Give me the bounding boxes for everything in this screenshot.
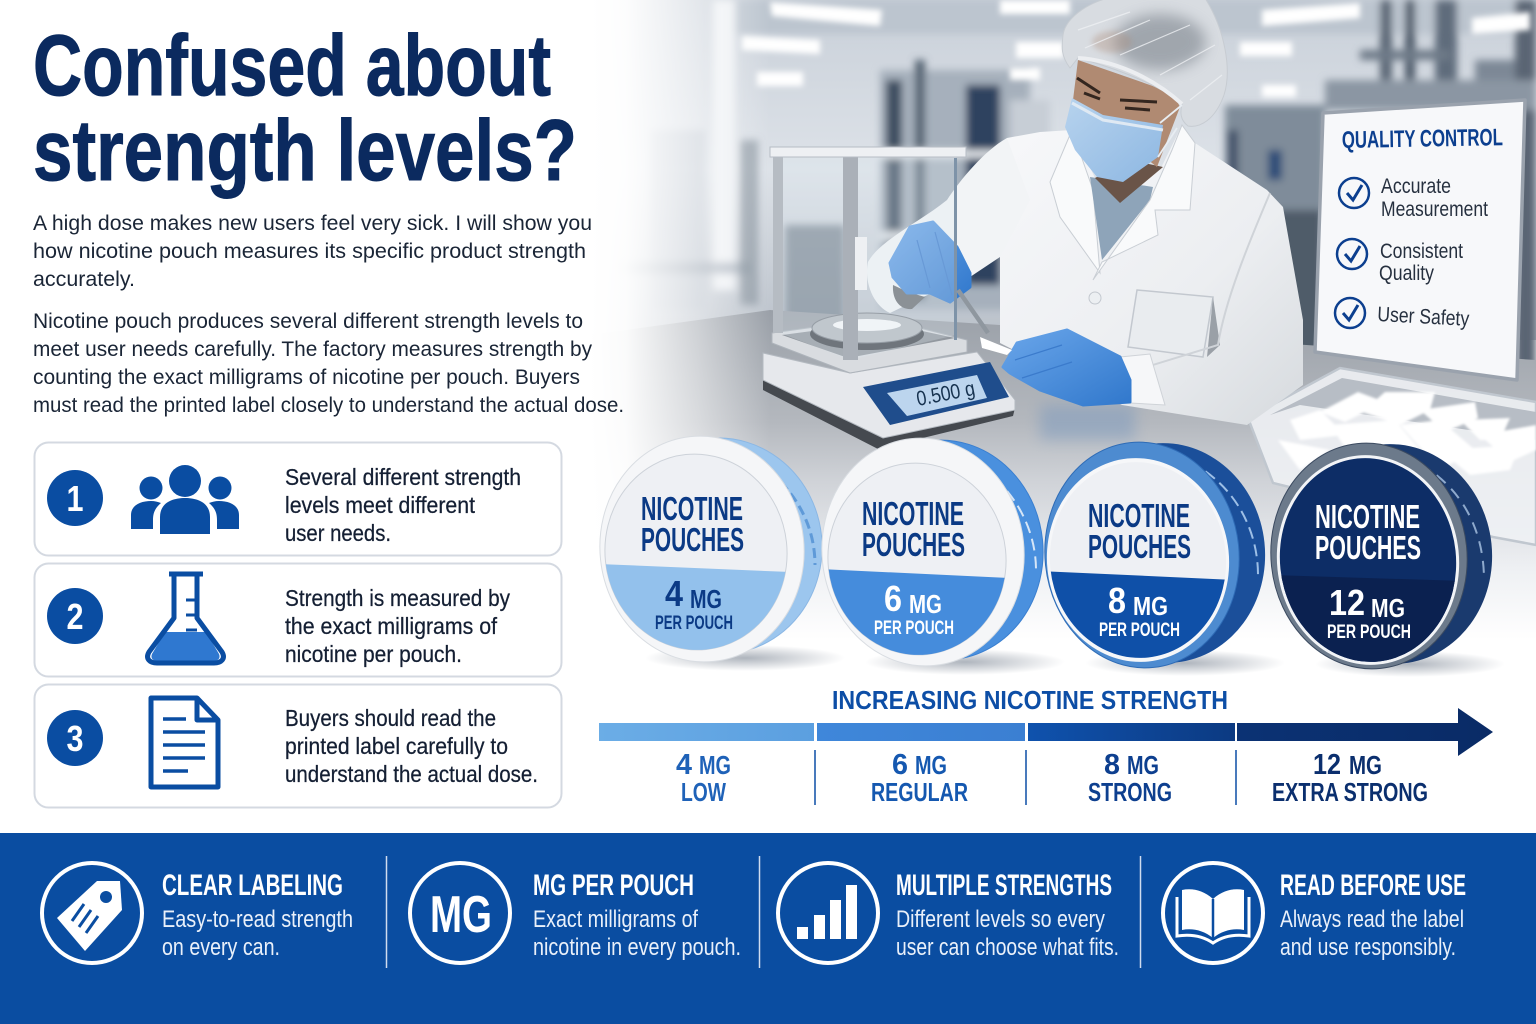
feature: clear labeling: CLEAR LABELING	[162, 869, 343, 902]
label: 8 mg strong	[1088, 749, 1172, 807]
surgical mask	[1065, 98, 1182, 182]
label: 4 mg low: LOW	[681, 777, 726, 807]
feature: clear labeling	[42, 863, 353, 963]
pocket	[1128, 290, 1213, 357]
can: 12 mg: 12	[1329, 582, 1365, 623]
face	[1073, 60, 1180, 167]
hairnet	[1062, 0, 1227, 126]
icon: price tag	[42, 863, 142, 963]
plastic tray with pouches	[1248, 368, 1536, 545]
can: 6 mg	[821, 438, 1044, 666]
feature: mg per pouch: Exact milligrams of	[533, 906, 698, 933]
card 3: read label	[34, 684, 562, 808]
icon: flask	[148, 574, 223, 663]
gloved left hand	[890, 222, 970, 302]
shirt	[1090, 177, 1153, 260]
quality control sign	[1315, 100, 1525, 380]
can: 4 mg: 4	[665, 573, 683, 614]
card 2: measurement	[34, 564, 562, 676]
can: 4 mg: PER POUCH	[655, 613, 733, 634]
can: 8 mg	[1044, 442, 1266, 668]
feature: multiple strengths	[778, 863, 1119, 963]
can: 4 mg: NICOTINE	[641, 490, 743, 527]
card 3 text: Buyers should read the	[285, 705, 496, 731]
digital display	[863, 362, 1009, 425]
white fade over photo	[590, 0, 770, 650]
number badge 2: 2	[66, 596, 84, 637]
number badge 3	[47, 710, 103, 766]
can: 4 mg	[599, 436, 822, 662]
check: user safety: User Safety	[1377, 303, 1470, 331]
icon: bar chart	[778, 863, 878, 963]
explanation paragraph	[33, 309, 624, 417]
check: accurate measurement: Accurate	[1381, 175, 1451, 198]
label: 12 mg extra strong: MG	[1349, 750, 1382, 780]
feature: read before use: and use responsibly.	[1280, 934, 1456, 961]
label: 4 mg low: MG	[699, 750, 731, 780]
label: 6 mg regular	[871, 749, 968, 807]
card 2 text: the exact milligrams of	[285, 613, 498, 639]
title	[33, 18, 577, 199]
icon: document	[151, 698, 218, 787]
can: 8 mg: PER POUCH	[1099, 620, 1180, 641]
icon: open book	[1163, 863, 1263, 963]
can: 6 mg: NICOTINE	[862, 495, 964, 532]
label: 6 mg regular: 6	[892, 749, 908, 781]
eyes	[1077, 78, 1157, 110]
intro paragraph	[33, 211, 592, 291]
digital display: 0.500 g	[915, 377, 977, 411]
feature: read before use: Always read the label	[1280, 906, 1464, 933]
explanation paragraph: counting the exact milligrams of nicotine per pouch. Buyers	[33, 365, 580, 389]
check: consistent quality: Consistent	[1380, 240, 1463, 263]
check: accurate measurement: Measurement	[1381, 198, 1488, 221]
card 1 text	[285, 464, 521, 546]
can: 6 mg: MG	[909, 589, 942, 619]
pan	[810, 313, 924, 350]
lab coat	[867, 125, 1303, 425]
feature: mg per pouch: nicotine in every pouch.	[533, 934, 741, 961]
scale body	[763, 352, 1015, 438]
label: 8 mg strong: STRONG	[1088, 777, 1172, 807]
explanation paragraph: meet user needs carefully. The factory measures strength by	[33, 337, 592, 361]
card 3 text: printed label carefully to	[285, 733, 508, 759]
weighing chamber floor	[772, 318, 967, 373]
gloved right hand	[1003, 330, 1130, 405]
label: 6 mg regular: MG	[915, 750, 947, 780]
card 1 text: Several different strength	[285, 464, 521, 490]
label: 12 mg extra strong: EXTRA STRONG	[1272, 777, 1428, 807]
precision scale	[763, 147, 1015, 449]
number badge 1: 1	[66, 478, 84, 519]
intro paragraph: accurately.	[33, 267, 135, 291]
feature: clear labeling: on every can.	[162, 934, 280, 961]
explanation paragraph: must read the printed label closely to understand the actual dose.	[33, 393, 624, 417]
card 2 text: nicotine per pouch.	[285, 641, 462, 667]
can: 6 mg: 6	[884, 578, 902, 619]
icon: people	[131, 465, 239, 534]
sleeve	[867, 138, 1030, 313]
explanation paragraph: Nicotine pouch produces several different strength levels to	[33, 309, 583, 333]
number badge 3: 3	[66, 718, 84, 759]
check: user safety	[1335, 298, 1470, 331]
bottom banner	[0, 833, 1536, 1024]
feature: mg per pouch: MG PER POUCH	[533, 869, 694, 902]
card 1 text: levels meet different	[285, 492, 476, 518]
collar right	[1093, 125, 1195, 280]
icon: MG badge: MG	[430, 886, 492, 944]
can: 6 mg: PER POUCH	[874, 618, 954, 639]
scale labels	[676, 749, 1428, 807]
title: Confused about	[33, 18, 551, 114]
can: 8 mg: MG	[1133, 591, 1168, 621]
background photo: laboratory	[632, 0, 1536, 606]
can: 12 mg	[1270, 442, 1492, 670]
can: 12 mg: POUCHES	[1315, 529, 1421, 566]
can: 4 mg: POUCHES	[641, 521, 744, 558]
can: 6 mg: POUCHES	[862, 526, 965, 563]
neck	[1095, 160, 1163, 203]
label: 8 mg strong: 8	[1104, 749, 1120, 781]
glass case	[770, 147, 966, 360]
feature: multiple strengths: user can choose what fits.	[896, 934, 1119, 961]
card 3 text: understand the actual dose.	[285, 761, 538, 787]
cuff	[1120, 354, 1165, 405]
can: 12 mg: MG	[1371, 593, 1405, 623]
label: 6 mg regular: REGULAR	[871, 777, 968, 807]
strength arrow bar	[599, 708, 1493, 756]
icon: MG badge	[410, 863, 510, 963]
scale foot	[763, 378, 1015, 449]
can: 12 mg: NICOTINE	[1315, 498, 1420, 535]
tweezers and pouch	[958, 290, 1012, 355]
card 2 text: Strength is measured by	[285, 585, 510, 611]
can: 12 mg: PER POUCH	[1327, 622, 1411, 643]
strength scale heading: INCREASING NICOTINE STRENGTH	[832, 685, 1228, 715]
intro paragraph: how nicotine pouch measures its specific product strength	[33, 239, 586, 263]
feature: multiple strengths: MULTIPLE STRENGTHS	[896, 869, 1112, 902]
can shadows	[645, 645, 1505, 677]
title: strength levels?	[33, 103, 577, 199]
collar left	[1050, 130, 1100, 273]
label: 12 mg extra strong: 12	[1313, 749, 1341, 781]
check: consistent quality	[1337, 239, 1463, 285]
can: 8 mg: 8	[1108, 580, 1126, 621]
card 1: strength levels	[34, 442, 562, 556]
label: 12 mg extra strong	[1272, 749, 1428, 807]
label: 8 mg strong: MG	[1127, 750, 1159, 780]
card 1 text: user needs.	[285, 520, 391, 546]
check: consistent quality: Quality	[1379, 262, 1434, 285]
intro paragraph: A high dose makes new users feel very sick. I will show you	[33, 211, 592, 235]
feature: mg per pouch	[410, 863, 741, 963]
number badge 1	[47, 470, 103, 526]
lab worker	[867, 0, 1303, 425]
number badge 2	[47, 588, 103, 644]
can: 4 mg: MG	[690, 584, 722, 614]
card 3 text	[285, 705, 538, 787]
feature: clear labeling: Easy-to-read strength	[162, 906, 353, 933]
check: accurate measurement	[1339, 175, 1488, 221]
can: 8 mg: NICOTINE	[1088, 497, 1190, 534]
label: 4 mg low	[676, 749, 731, 807]
label: 4 mg low: 4	[676, 749, 692, 781]
feature: read before use	[1163, 863, 1466, 963]
feature: multiple strengths: Different levels so every	[896, 906, 1105, 933]
can: 8 mg: POUCHES	[1088, 528, 1191, 565]
card 2 text	[285, 585, 510, 667]
